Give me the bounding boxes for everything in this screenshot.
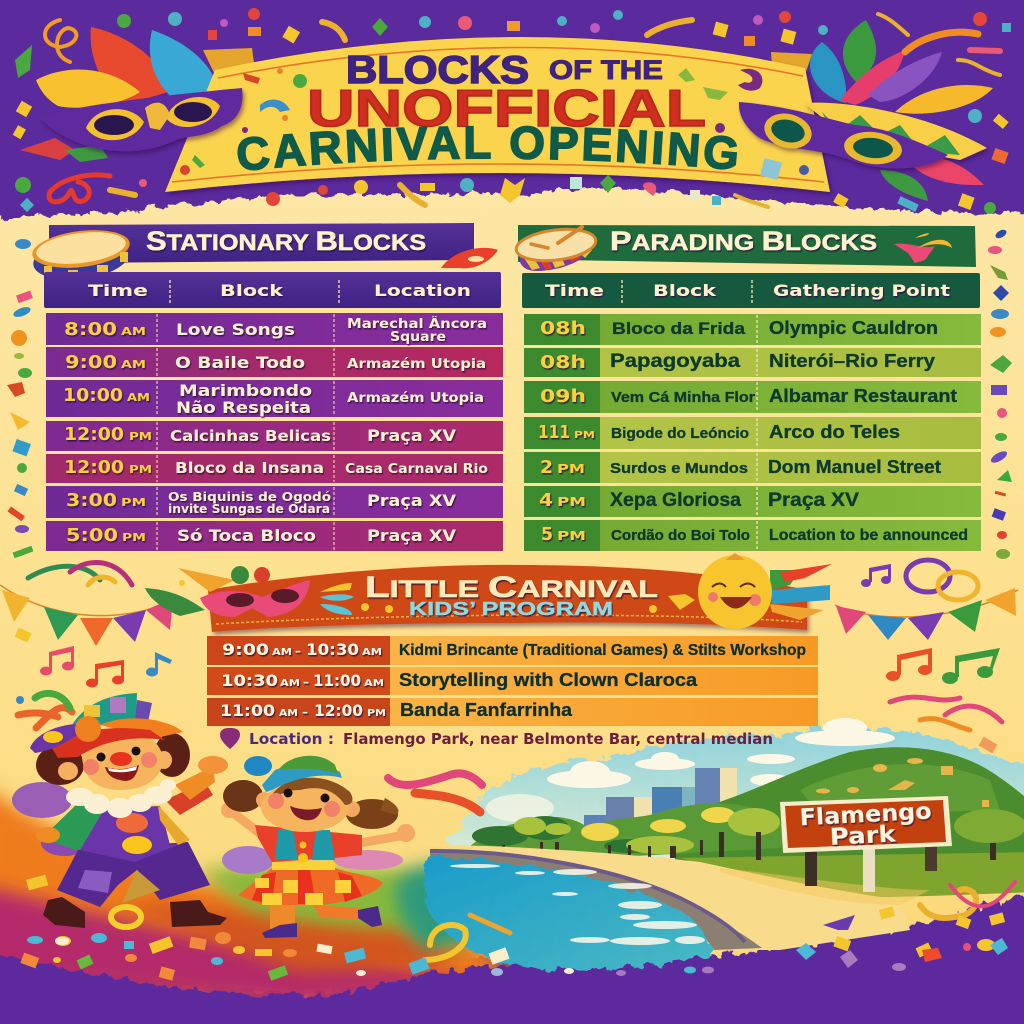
parading table rows: Dom Manuel Street <box>768 457 941 477</box>
parading table rows: PM <box>557 495 586 509</box>
stationary table rows: Square <box>390 330 446 345</box>
stationary table rows: Armazém Utopia <box>347 356 486 372</box>
kids program table: Banda Fanfarrinha <box>400 700 573 720</box>
parading table rows: Niterói–Rio Ferry <box>769 351 935 371</box>
parading table header: Gathering Point <box>773 281 950 300</box>
hill confetti <box>816 758 989 807</box>
kids program table: – <box>295 644 301 658</box>
kids program table: 9:00 <box>222 640 269 659</box>
stationary table rows: 12:00 <box>64 424 124 445</box>
stationary table rows: Praça XV <box>367 491 457 510</box>
banner side swooshes <box>320 583 695 615</box>
stationary table rows: Só Toca Bloco <box>177 526 316 545</box>
stationary table rows: Marimbondo <box>179 381 312 400</box>
character: clown <box>12 693 228 928</box>
parading table rows: Surdos e Mundos <box>610 460 748 477</box>
icon: pink mask <box>145 566 310 617</box>
stationary table header: Block <box>220 281 283 300</box>
girl top <box>255 825 362 863</box>
title text <box>237 49 738 170</box>
parading table rows: Arco do Teles <box>769 422 900 442</box>
kids program table: 12:00 <box>314 701 363 720</box>
parading table rows: 5 <box>541 524 553 545</box>
location line: Location : <box>249 730 334 748</box>
water <box>425 856 711 970</box>
stationary table rows: Não Respeita <box>176 398 311 417</box>
stationary table rows: 9:00 <box>65 352 117 373</box>
side confetti: left <box>7 239 33 558</box>
parading table rows: 08h <box>540 352 586 373</box>
stationary table rows <box>46 313 503 551</box>
stationary table rows: AM <box>121 358 146 371</box>
kids banner title <box>365 571 658 619</box>
parading heading banner <box>518 225 976 267</box>
stationary table rows: Marechal Âncora <box>347 316 487 332</box>
middle decorations: bunting, rings, music notes <box>0 560 1018 753</box>
tree line <box>470 803 1024 860</box>
kids program table: Kidmi Brincante (Traditional Games) & Stilts Workshop <box>399 642 806 659</box>
stationary table rows: O Baile Todo <box>175 353 305 372</box>
parading table header <box>522 273 980 308</box>
title text: UNOFFICIAL <box>307 80 706 138</box>
kids banner title: L ITTLE C ARNIVAL <box>365 571 658 604</box>
parading table rows: 2 <box>540 457 553 478</box>
clown head <box>36 732 190 790</box>
stationary table rows: 10:00 <box>63 385 123 406</box>
stationary table rows: 8:00 <box>64 319 117 340</box>
parading table rows: 111 <box>538 422 570 443</box>
kids program table: 11:00 <box>220 701 275 720</box>
park sign: Flamengo <box>799 799 932 831</box>
kids program table: Storytelling with Clown Claroca <box>399 670 698 690</box>
stationary table rows: 3:00 <box>66 490 117 511</box>
parading table rows: 09h <box>540 386 586 407</box>
kids program table: AM <box>364 678 384 689</box>
girl wings <box>222 846 403 874</box>
water curb <box>430 851 762 950</box>
lawn <box>680 852 1024 897</box>
parading table rows: Albamar Restaurant <box>769 386 957 406</box>
stationary table rows: PM <box>129 430 152 443</box>
parading table rows: Cordão do Boi Tolo <box>611 527 750 544</box>
sky <box>440 727 1024 860</box>
girl skirt <box>238 862 383 905</box>
location line: Flamengo Park, near Belmonte Bar, central median <box>343 730 773 748</box>
panel: stationary blocks <box>30 223 503 551</box>
banner confetti <box>180 68 809 180</box>
parading heading banner: PARADING BLOCKS <box>610 226 877 256</box>
kids program banner <box>145 553 832 632</box>
clouds <box>486 718 895 822</box>
stationary table rows: Praça XV <box>367 426 457 445</box>
stationary table rows: Love Songs <box>176 320 295 339</box>
left feathers <box>20 27 218 162</box>
sand <box>430 845 910 950</box>
stationary heading banner <box>49 223 474 263</box>
panel: parading blocks <box>514 225 981 551</box>
stationary table rows: AM <box>121 325 146 338</box>
right feathers <box>810 20 993 201</box>
character: girl <box>221 756 415 938</box>
hill <box>675 747 1024 880</box>
parading table rows: PM <box>557 462 585 476</box>
bottom confetti <box>20 875 1008 981</box>
music notes <box>40 564 1000 688</box>
kids program table: AM <box>280 678 300 689</box>
parading table rows: Bigode do Leóncio <box>611 425 749 442</box>
kids program table: – <box>302 705 308 719</box>
girl arms <box>232 812 405 843</box>
stationary table rows: Bloco da Insana <box>175 459 324 477</box>
stationary table rows: 12:00 <box>64 457 124 478</box>
girl legs <box>262 903 382 938</box>
top confetti and streamers <box>13 8 1011 214</box>
kids program table: PM <box>367 708 386 719</box>
parading table header: Block <box>653 281 716 300</box>
parading table rows: Papagoyaba <box>610 351 740 372</box>
stationary table rows: PM <box>121 496 146 509</box>
stationary table rows: Armazém Utopia <box>347 390 484 406</box>
stationary heading banner: STATIONARY BLOCKS <box>146 226 426 256</box>
parading table rows: 08h <box>540 318 586 339</box>
park scene <box>395 718 1024 970</box>
parading table rows: PM <box>574 430 595 441</box>
park sign: Park <box>829 821 897 851</box>
parading table header: Time <box>545 281 604 300</box>
parading table rows: Bloco da Frida <box>612 319 746 338</box>
stationary table rows: Calcinhas Belicas <box>170 427 331 445</box>
parading table rows: Praça XV <box>768 490 859 511</box>
parading table rows: Vem Cá Minha Flor <box>611 389 755 406</box>
kids program table: 11:00 <box>313 671 361 690</box>
stationary table rows: Praça XV <box>367 526 457 545</box>
stationary table header <box>44 272 501 308</box>
stationary table rows: Os Biquinis de Ogodó <box>168 489 331 504</box>
stationary table rows: AM <box>127 391 150 404</box>
kids program table: 10:30 <box>306 640 359 659</box>
kids program table: AM <box>362 647 382 658</box>
side confetti: right <box>988 228 1012 559</box>
park sign <box>780 796 952 892</box>
clown hat <box>30 693 183 758</box>
icon: smiling sun <box>698 553 832 629</box>
stationary table rows: invite Sungas de Odara <box>168 502 330 516</box>
stationary table header: Time <box>88 281 148 300</box>
clown torso <box>36 756 228 862</box>
kids program table: 10:30 <box>221 671 278 690</box>
stationary table rows: PM <box>122 531 146 544</box>
clown legs <box>43 842 227 928</box>
parading table rows: Xepa Gloriosa <box>610 490 741 511</box>
ribbons over scene <box>388 773 1015 960</box>
parading table rows: Location to be announced <box>769 527 968 544</box>
icon: drum <box>514 225 598 271</box>
title banner <box>165 37 833 196</box>
kids program table: AM <box>272 647 292 658</box>
kids program table: AM <box>279 708 298 719</box>
title text: BLOCKS <box>346 49 529 92</box>
parading table rows: PM <box>557 529 586 543</box>
stationary table rows: PM <box>129 463 152 476</box>
title text: OF THE <box>549 55 663 85</box>
kids banner title: KIDS’ PROGRAM <box>409 599 613 619</box>
icon: small mask <box>441 248 498 268</box>
kids program table <box>207 636 818 726</box>
kids program table: – <box>303 675 309 689</box>
title text: CARNIVAL OPENING <box>237 126 738 170</box>
right mask <box>739 102 987 168</box>
shoreline glow <box>395 864 480 950</box>
location line <box>220 728 773 749</box>
parading table rows: Olympic Cauldron <box>769 318 938 338</box>
buildings <box>584 768 737 835</box>
parading table rows <box>524 314 981 551</box>
parading table rows: 4 <box>539 490 553 511</box>
girl head <box>223 756 398 832</box>
left mask <box>39 88 243 151</box>
clown wings <box>12 782 89 856</box>
stationary table rows: Casa Carnaval Rio <box>345 461 488 477</box>
clown collar <box>66 779 176 818</box>
stationary table header: Location <box>374 281 471 300</box>
stationary table rows: 5:00 <box>66 525 118 546</box>
icon: tambourine <box>30 225 132 285</box>
girl hands <box>221 802 415 842</box>
